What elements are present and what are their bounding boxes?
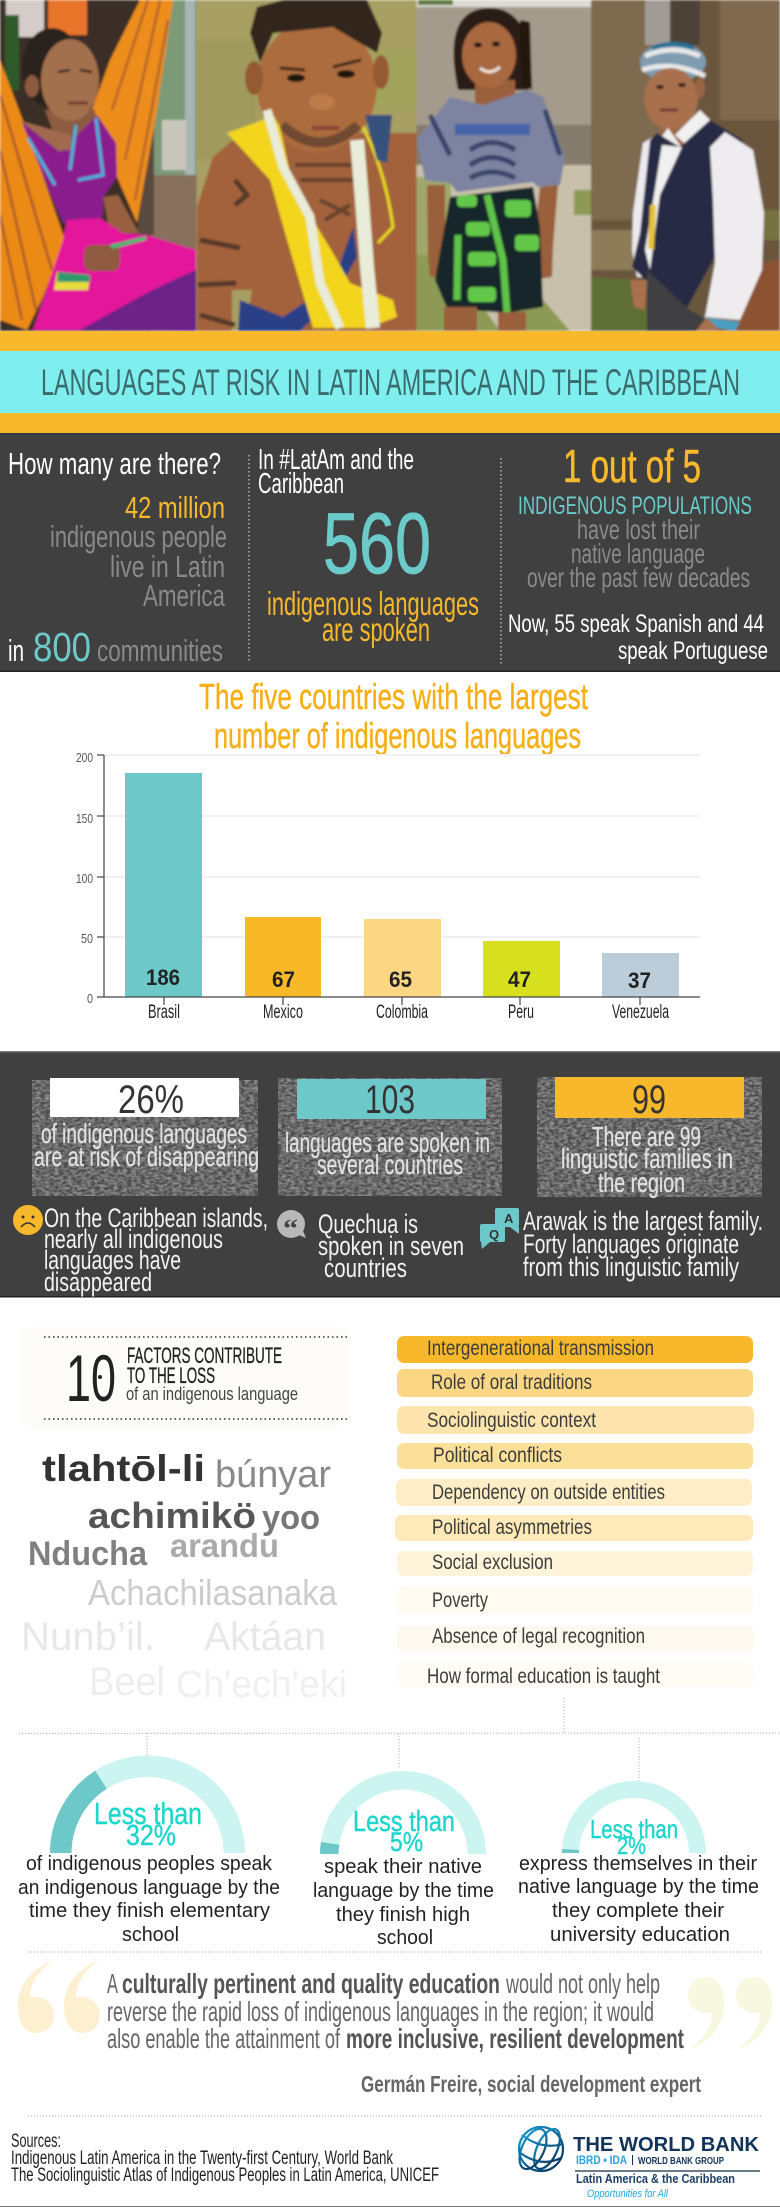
column 1 stats: communities — [97, 633, 223, 668]
sources: The Sociolinguistic Atlas of Indigenous Peoples in Latin America, UNICEF — [11, 2165, 439, 2186]
factor 4 — [397, 1443, 753, 1469]
word cloud: indigenous words — [21, 1448, 347, 1706]
bar: Peru: Peru — [508, 1002, 534, 1023]
factor 9 — [397, 1625, 754, 1652]
column 1 stats: 800 — [33, 624, 91, 670]
column 3 stats: 1 out of 5 — [563, 440, 701, 492]
panel: ten factors heading: FACTORS CONTRIBUTE — [127, 1343, 282, 1368]
bar chart: 100 — [76, 871, 93, 886]
bar: Mexico: 67 — [272, 967, 295, 992]
column 2 stats: 560 — [323, 496, 431, 592]
bar chart: 50 — [81, 931, 93, 946]
card: 26 percent — [32, 1078, 259, 1196]
logo: World Bank: WORLD BANK GROUP — [638, 2156, 724, 2167]
column 3 stats: native language — [571, 538, 705, 569]
icon: speech bubble with quote: “ — [283, 1214, 298, 1243]
word cloud: indigenous words: Aktáan — [204, 1615, 326, 1659]
sources: Sources: — [11, 2131, 61, 2152]
sources: Indigenous Latin America in the Twenty-first Century, World Bank — [11, 2148, 393, 2169]
factor 8: Poverty — [432, 1589, 488, 1612]
factor 2: Role of oral traditions — [431, 1371, 592, 1394]
bar: Colombia: Colombia — [376, 1002, 428, 1023]
factor 7: Social exclusion — [432, 1551, 553, 1574]
card: 103 languages: 103 — [365, 1078, 415, 1122]
text: Caribbean islands — [44, 1203, 268, 1297]
card: 103 languages: several countries — [317, 1149, 463, 1180]
factor 7 — [397, 1551, 753, 1576]
chart heading: number of indigenous languages — [214, 715, 581, 756]
word cloud: indigenous words: achimikö — [88, 1495, 256, 1536]
column 2 stats — [258, 444, 479, 648]
lower orange band — [0, 413, 780, 433]
bar: Mexico: Mexico — [263, 1002, 303, 1023]
gauge: elementary school 32 percent: an indigenous language by the — [18, 1877, 280, 1899]
gauge: high school 5 percent: language by the time — [313, 1880, 494, 1902]
word cloud: indigenous words: búnyar — [215, 1454, 331, 1496]
icon: question and answer bubbles: Q — [489, 1227, 499, 1242]
panel: ten factors heading: of an indigenous language — [126, 1384, 298, 1404]
column 1 stats: in — [8, 633, 24, 668]
gauge: university 2 percent: university education — [550, 1924, 730, 1946]
gauge: high school 5 percent: 5% — [390, 1827, 423, 1857]
text: Caribbean islands: disappeared — [44, 1267, 152, 1297]
bar chart: 0 — [87, 991, 93, 1006]
factor list — [395, 1336, 754, 1688]
gauge: elementary school 32 percent: time they finish elementary — [29, 1900, 270, 1922]
factor 4: Political conflicts — [433, 1444, 562, 1467]
column 1 stats: live in Latin — [110, 549, 225, 584]
photo: woman in hammock — [0, 0, 197, 335]
bar: Venezuela: 37 — [628, 968, 651, 993]
top orange band — [0, 331, 780, 351]
gauge: elementary school 32 percent: school — [122, 1924, 179, 1946]
word cloud: indigenous words: Ch'ech'eki — [176, 1664, 347, 1706]
column 1 stats: indigenous people — [50, 519, 227, 554]
factor 2 — [397, 1369, 753, 1397]
gauge: elementary school 32 percent: of indigenous peoples speak — [26, 1853, 273, 1875]
bar: Peru: 47 — [508, 967, 531, 992]
bar: Venezuela: Venezuela — [612, 1002, 669, 1023]
factor 3: Sociolinguistic context — [427, 1409, 596, 1432]
bar: Brasil: 186 — [146, 965, 180, 990]
gauge: high school 5 percent — [313, 1771, 494, 1949]
factor 3 — [397, 1406, 754, 1434]
bar chart — [76, 750, 700, 1023]
logo: World Bank: Opportunities for All — [587, 2188, 668, 2200]
quote text: A — [107, 1968, 118, 1999]
panel: ten factors heading: 10 — [66, 1341, 116, 1415]
icon: closing quotation mark — [688, 1977, 772, 2050]
factor 9: Absence of legal recognition — [432, 1625, 645, 1648]
column 3 stats — [508, 440, 768, 665]
logo: World Bank — [514, 2125, 760, 2200]
chart heading: The five countries with the largest — [199, 676, 588, 717]
chart heading — [199, 676, 588, 756]
factor 1 — [397, 1336, 753, 1363]
bar: Mexico — [245, 917, 321, 1023]
icon: sad face — [13, 1205, 43, 1235]
gauge: high school 5 percent: school — [377, 1927, 433, 1949]
bar: Venezuela — [602, 953, 679, 1023]
gauge: university 2 percent: they complete their — [552, 1900, 724, 1922]
gauge: university 2 percent — [518, 1781, 759, 1946]
column 3 stats: have lost their — [577, 514, 700, 545]
gauge: high school 5 percent: Less than — [353, 1806, 455, 1838]
column 2 stats: Caribbean — [258, 468, 344, 500]
factor 1: Intergenerational transmission — [427, 1337, 654, 1360]
card: 26 percent: are at risk of disappearing — [34, 1141, 259, 1172]
text: Caribbean islands: nearly all indigenous — [44, 1224, 223, 1254]
panel: ten factors heading: TO THE LOSS — [127, 1363, 215, 1388]
bar: Peru — [483, 941, 560, 1023]
bar: Colombia: 65 — [389, 967, 412, 992]
panel: language facts — [0, 1051, 780, 1298]
photo: man in vest and beaded hat — [591, 0, 780, 331]
factor 6: Political asymmetries — [432, 1516, 592, 1539]
text: Quechua: spoken in seven — [318, 1231, 464, 1261]
gauge: university 2 percent: native language by the time — [518, 1876, 759, 1898]
gauge: elementary school 32 percent: 32% — [126, 1820, 176, 1852]
card: 99 families: There are 99 — [592, 1121, 701, 1152]
logo: World Bank: THE WORLD BANK — [573, 2134, 760, 2156]
column 2 stats: In #LatAm and the — [258, 444, 414, 476]
word cloud: indigenous words: arandu — [170, 1527, 279, 1564]
column 1 stats: America — [143, 578, 226, 613]
photo: girl in patterned blouse — [416, 0, 592, 331]
text: Caribbean islands: On the Caribbean islands, — [44, 1203, 268, 1233]
card: 103 languages — [278, 1078, 502, 1196]
quote text: culturally pertinent and quality education — [122, 1968, 500, 1999]
logo: World Bank: Latin America & the Caribbean — [576, 2172, 735, 2186]
panel: how many are there — [0, 433, 780, 672]
card: 99 families — [537, 1077, 762, 1198]
icon: question and answer bubbles: A — [504, 1211, 514, 1226]
card: 26 percent: 26% — [118, 1078, 184, 1122]
title banner — [0, 351, 780, 413]
card: 99 families: 99 — [632, 1078, 666, 1122]
icon: speech bubble with quote — [277, 1210, 306, 1243]
logo: World Bank: IBRD • IDA — [576, 2153, 627, 2167]
text: Quechua — [318, 1209, 464, 1283]
factor 8 — [397, 1587, 753, 1614]
bar chart: 150 — [76, 811, 93, 826]
icon: opening quotation mark — [18, 1960, 100, 2033]
gauge: university 2 percent: 2% — [617, 1833, 646, 1860]
factor 6 — [395, 1515, 753, 1541]
word cloud: indigenous words: Achachilasanaka — [88, 1572, 338, 1613]
column 2 stats: are spoken — [322, 611, 430, 648]
word cloud: indigenous words: Nducha — [28, 1535, 148, 1573]
gauge: elementary school 32 percent — [18, 1756, 280, 1946]
text: Quechua: Quechua is — [318, 1209, 418, 1239]
factor 10: How formal education is taught — [427, 1665, 660, 1688]
word cloud: indigenous words: Beel — [89, 1660, 165, 1704]
word cloud: indigenous words: Nunb’il. — [21, 1615, 155, 1659]
bar: Colombia — [364, 919, 441, 1023]
quote text: would not only help — [505, 1968, 660, 1999]
text: Quechua: countries — [324, 1253, 407, 1283]
gauge: elementary school 32 percent: Less than — [94, 1796, 202, 1831]
photo: boy with yellow necklaces — [196, 0, 417, 331]
column 1 stats: 42 million — [125, 490, 225, 525]
gauge: high school 5 percent: they finish high — [336, 1904, 470, 1926]
column 1 stats — [8, 446, 227, 670]
bar chart: 200 — [76, 750, 93, 765]
sources — [11, 2131, 439, 2186]
bar: Brasil — [125, 773, 202, 1023]
word cloud: indigenous words: tlahtōl-li — [42, 1448, 205, 1489]
panel: ten factors heading — [19, 1327, 349, 1428]
bar: Brasil: Brasil — [148, 1002, 180, 1023]
gauge: university 2 percent: express themselves in their — [519, 1853, 757, 1875]
gauge: university 2 percent: Less than — [590, 1814, 678, 1844]
icon: question and answer bubbles — [480, 1208, 519, 1249]
quote text: also enable the attainment of — [107, 2023, 340, 2054]
card: 26 percent: of indigenous languages — [41, 1118, 247, 1149]
gauge: high school 5 percent: speak their native — [324, 1856, 482, 1878]
text: Caribbean islands: languages have — [44, 1245, 181, 1275]
word cloud: indigenous words: yoo — [262, 1499, 320, 1537]
icon: globe — [514, 2125, 565, 2173]
card: 103 languages: languages are spoken in — [285, 1127, 490, 1158]
column 1 stats: How many are there? — [8, 446, 221, 481]
factor 5: Dependency on outside entities — [432, 1481, 665, 1504]
text: Arawak — [523, 1206, 763, 1282]
photo strip: four indigenous portraits — [0, 0, 780, 335]
quote text — [107, 1968, 684, 2054]
column 2 stats: indigenous languages — [267, 585, 479, 622]
card: 99 families: the region — [598, 1167, 685, 1198]
